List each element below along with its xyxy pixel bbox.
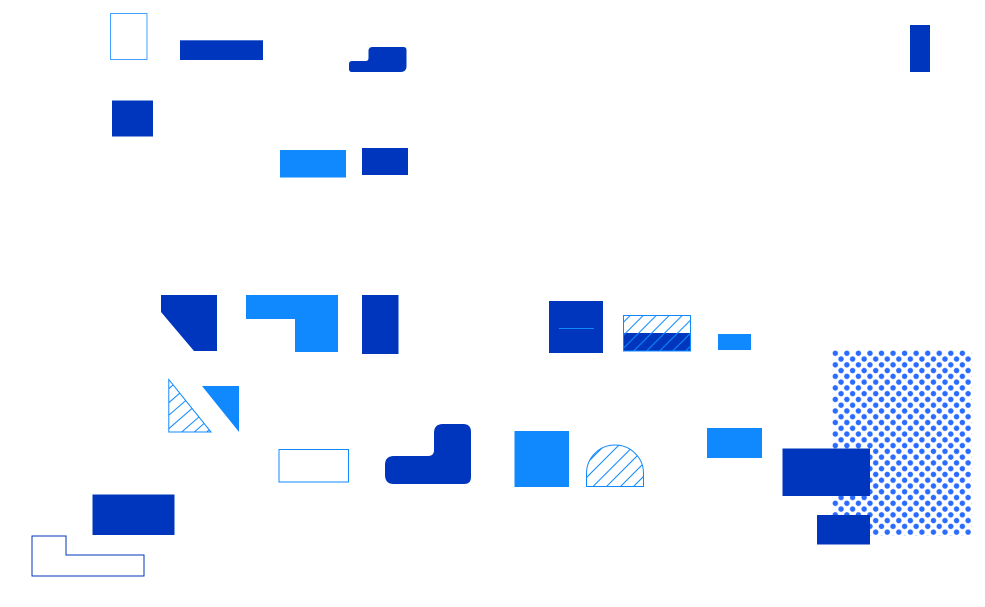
dark rectangle bottom left bbox=[92, 494, 174, 535]
dark vertical rectangle bbox=[362, 295, 398, 354]
small dark rectangle over dots bbox=[817, 515, 870, 544]
light blue rectangle right bbox=[707, 428, 762, 458]
light blue rectangle bbox=[280, 150, 346, 178]
outline L shape bottom left bbox=[32, 536, 144, 576]
dot pattern panel bbox=[832, 350, 971, 535]
half hatched rectangle bbox=[624, 316, 690, 351]
dark square bbox=[112, 100, 153, 136]
rounded step shape top bbox=[349, 47, 406, 72]
rounded dark L shape bbox=[385, 424, 471, 484]
light blue L shape bbox=[246, 295, 338, 352]
dark chamfered shape bbox=[161, 295, 217, 351]
dark vertical bar top right bbox=[910, 25, 930, 72]
outline rectangle middle bbox=[279, 450, 348, 482]
dark square with line bbox=[549, 301, 603, 353]
dark rectangle over dots bbox=[782, 448, 870, 496]
light blue triangle bbox=[202, 386, 239, 432]
hatched triangle bbox=[168, 378, 212, 432]
outline rectangle top left bbox=[110, 14, 147, 60]
dark rectangle bbox=[362, 148, 408, 175]
dark bar top bbox=[180, 40, 263, 60]
light blue square bbox=[514, 431, 569, 487]
small light blue rectangle bbox=[718, 334, 751, 350]
hatched dome bbox=[586, 444, 644, 487]
